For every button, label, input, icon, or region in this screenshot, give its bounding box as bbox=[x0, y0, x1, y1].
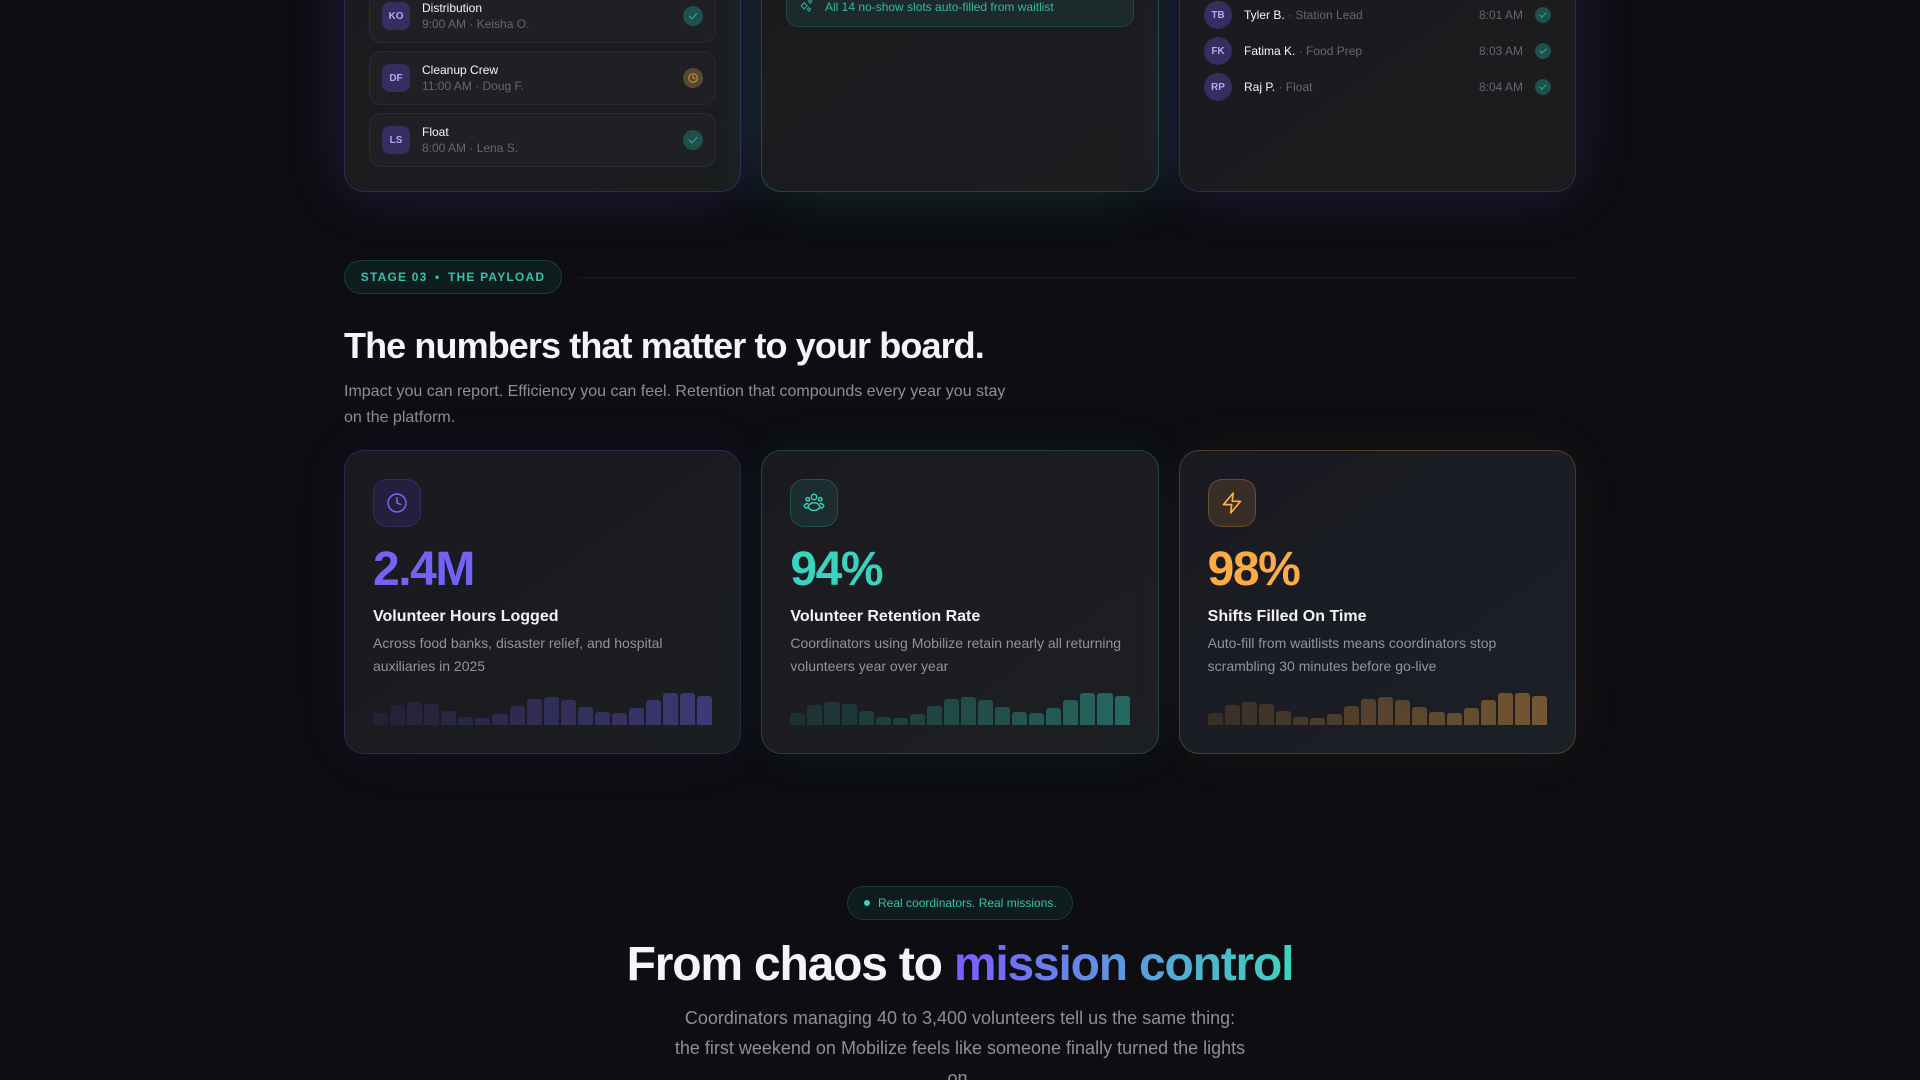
sparkline bars bbox=[373, 693, 712, 725]
shift name: Float bbox=[422, 125, 449, 139]
stat title: Volunteer Hours Logged bbox=[373, 608, 558, 625]
stat card: retention bbox=[761, 450, 1159, 754]
notice text: All 14 no-show slots auto-filled from waitlist bbox=[825, 0, 1054, 14]
avatar: FK: FK bbox=[1211, 46, 1225, 57]
avatar: DF: DF bbox=[389, 73, 403, 84]
avatar: TB bbox=[1204, 1, 1232, 29]
closing heading: From chaos to mission control bbox=[627, 938, 1293, 991]
stage badge: STAGE 03 • THE PAYLOAD bbox=[361, 270, 545, 284]
status: pending bbox=[683, 68, 703, 88]
shift details: 11:00 AM · Doug F. bbox=[422, 79, 524, 93]
avatar: LS: LS bbox=[390, 135, 402, 146]
avatar: KO bbox=[382, 2, 410, 30]
shift row: float bbox=[369, 113, 716, 167]
shift name: Cleanup Crew bbox=[422, 63, 498, 77]
stat title: Shifts Filled On Time bbox=[1208, 608, 1366, 625]
icon: clock bbox=[373, 479, 421, 527]
volunteer name and role: Raj P. · Float bbox=[1244, 80, 1312, 94]
avatar: TB: TB bbox=[1211, 10, 1225, 21]
avatar: RP: RP bbox=[1211, 82, 1225, 93]
check-in row: Tyler B. bbox=[1204, 1, 1551, 29]
stage badge bbox=[344, 260, 562, 294]
stat value: 2.4M bbox=[373, 542, 474, 596]
status: confirmed bbox=[683, 130, 703, 150]
stat description: Across food banks, disaster relief, and hospital auxiliaries in 2025 bbox=[373, 635, 662, 674]
closing description bbox=[675, 1008, 1245, 1080]
volunteer name and role: Tyler B. · Station Lead bbox=[1244, 8, 1363, 22]
stat description: Auto-fill from waitlists means coordinators stop scrambling 30 minutes before go-live bbox=[1208, 635, 1496, 674]
callout: auto-filled notice bbox=[786, 0, 1134, 27]
icon: checked in bbox=[1535, 43, 1551, 59]
status: confirmed bbox=[683, 6, 703, 26]
shift row: distribution bbox=[369, 0, 716, 43]
check-in time: 8:04 AM bbox=[1479, 80, 1523, 94]
icon: people bbox=[790, 479, 838, 527]
stat value: 98% bbox=[1208, 542, 1299, 596]
stat description: Coordinators using Mobilize retain nearly all returning volunteers year over year bbox=[790, 635, 1121, 674]
check-in time: 8:03 AM bbox=[1479, 44, 1523, 58]
volunteer name and role: Fatima K. · Food Prep bbox=[1244, 44, 1362, 58]
section heading: The numbers that matter to your board. bbox=[344, 325, 984, 366]
icon: lightning bolt bbox=[1208, 479, 1256, 527]
panel: check-in card bbox=[1179, 0, 1576, 192]
icon: checked in bbox=[1535, 79, 1551, 95]
avatar: FK bbox=[1204, 37, 1232, 65]
testimonial badge bbox=[847, 886, 1073, 920]
shift details: 9:00 AM · Keisha O. bbox=[422, 17, 529, 31]
stat card: shifts filled bbox=[1179, 450, 1576, 754]
stat title: Volunteer Retention Rate bbox=[790, 608, 980, 625]
sparkline bars bbox=[1208, 693, 1547, 725]
badge dot bbox=[864, 900, 870, 906]
sparkline bars bbox=[790, 693, 1130, 725]
shift row: cleanup crew bbox=[369, 51, 716, 105]
shift details: 8:00 AM · Lena S. bbox=[422, 141, 518, 155]
check-in time: 8:01 AM bbox=[1479, 8, 1523, 22]
shift name: Distribution bbox=[422, 1, 482, 15]
panel: auto-fill card bbox=[761, 0, 1159, 192]
avatar: LS bbox=[382, 126, 410, 154]
panel: shift assignments card bbox=[344, 0, 741, 192]
icon: sparkles bbox=[800, 0, 813, 12]
avatar: RP bbox=[1204, 73, 1232, 101]
section description: Impact you can report. Efficiency you can feel. Retention that compounds every year you stay on the platform. bbox=[344, 383, 1005, 426]
badge text: Real coordinators. Real missions. bbox=[878, 896, 1057, 910]
closing description: Coordinators managing 40 to 3,400 volunteers tell us the same thing: bbox=[685, 1008, 1235, 1028]
check-in row: Fatima K. bbox=[1204, 37, 1551, 65]
stat value: 94% bbox=[790, 542, 882, 596]
stat card: volunteer hours bbox=[344, 450, 741, 754]
avatar: KO: KO bbox=[388, 11, 404, 22]
avatar: DF bbox=[382, 64, 410, 92]
icon: checked in bbox=[1535, 7, 1551, 23]
check-in row: Raj P. bbox=[1204, 73, 1551, 101]
